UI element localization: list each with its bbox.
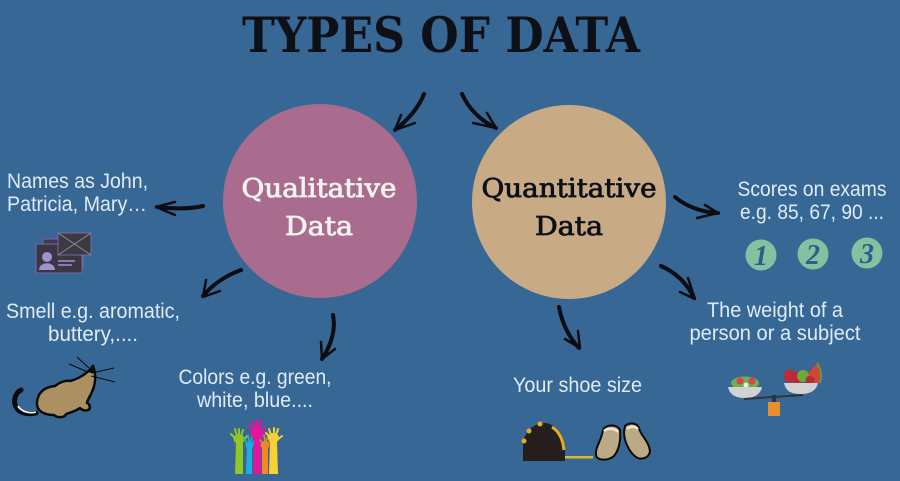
text: smell	[6, 299, 180, 346]
arrow: to names	[156, 202, 203, 215]
text: names	[7, 169, 148, 216]
icon: numbered badges: 1	[754, 241, 768, 272]
panel: quantitative data circle: Quantitative	[482, 174, 656, 204]
text: scores: Scores on exams	[738, 177, 886, 201]
icon: mouse	[15, 357, 115, 417]
text: weight	[690, 298, 861, 345]
arrow: to scores	[675, 197, 718, 218]
panel: quantitative data circle: Data	[535, 212, 603, 242]
text: scores	[738, 177, 886, 224]
text: scores: e.g. 85, 67, 90 ...	[740, 200, 884, 224]
text: colors	[178, 365, 332, 412]
text: colors: Colors e.g. green,	[178, 365, 332, 389]
text: weight: person or a subject	[690, 321, 861, 345]
text: names: Names as John,	[7, 169, 148, 193]
panel: qualitative data circle: Qualitative	[242, 174, 396, 204]
panel: qualitative data circle	[223, 104, 417, 298]
title: TYPES OF DATA	[242, 6, 641, 64]
arrow: title to quantitative	[462, 94, 496, 128]
icon: numbered badges	[746, 238, 882, 272]
text: colors: white, blue....	[196, 388, 313, 412]
icon: numbered badges: 2	[805, 240, 820, 271]
icon: balance scale with salad and fruit	[728, 363, 821, 416]
text: weight: The weight of a	[707, 298, 843, 322]
arrow: title to qualitative	[395, 94, 424, 130]
text: shoe size: Your shoe size	[513, 373, 642, 397]
arrow: to smell	[203, 270, 241, 297]
panel: qualitative data circle: Data	[285, 212, 353, 242]
arrow: to shoe size	[559, 307, 580, 348]
panel: quantitative data circle	[472, 105, 666, 299]
arrow: to weight	[661, 266, 695, 299]
text: smell: buttery,....	[48, 322, 138, 346]
icon: contact card and envelope	[36, 233, 91, 273]
arrow: to colors	[321, 315, 335, 359]
icon: numbered badges: 3	[859, 239, 874, 270]
text: names: Patricia, Mary…	[7, 192, 147, 216]
text: smell: Smell e.g. aromatic,	[6, 299, 180, 323]
icon: measuring tape and shoes	[522, 422, 650, 461]
icon: colourful raised hands	[231, 420, 282, 474]
